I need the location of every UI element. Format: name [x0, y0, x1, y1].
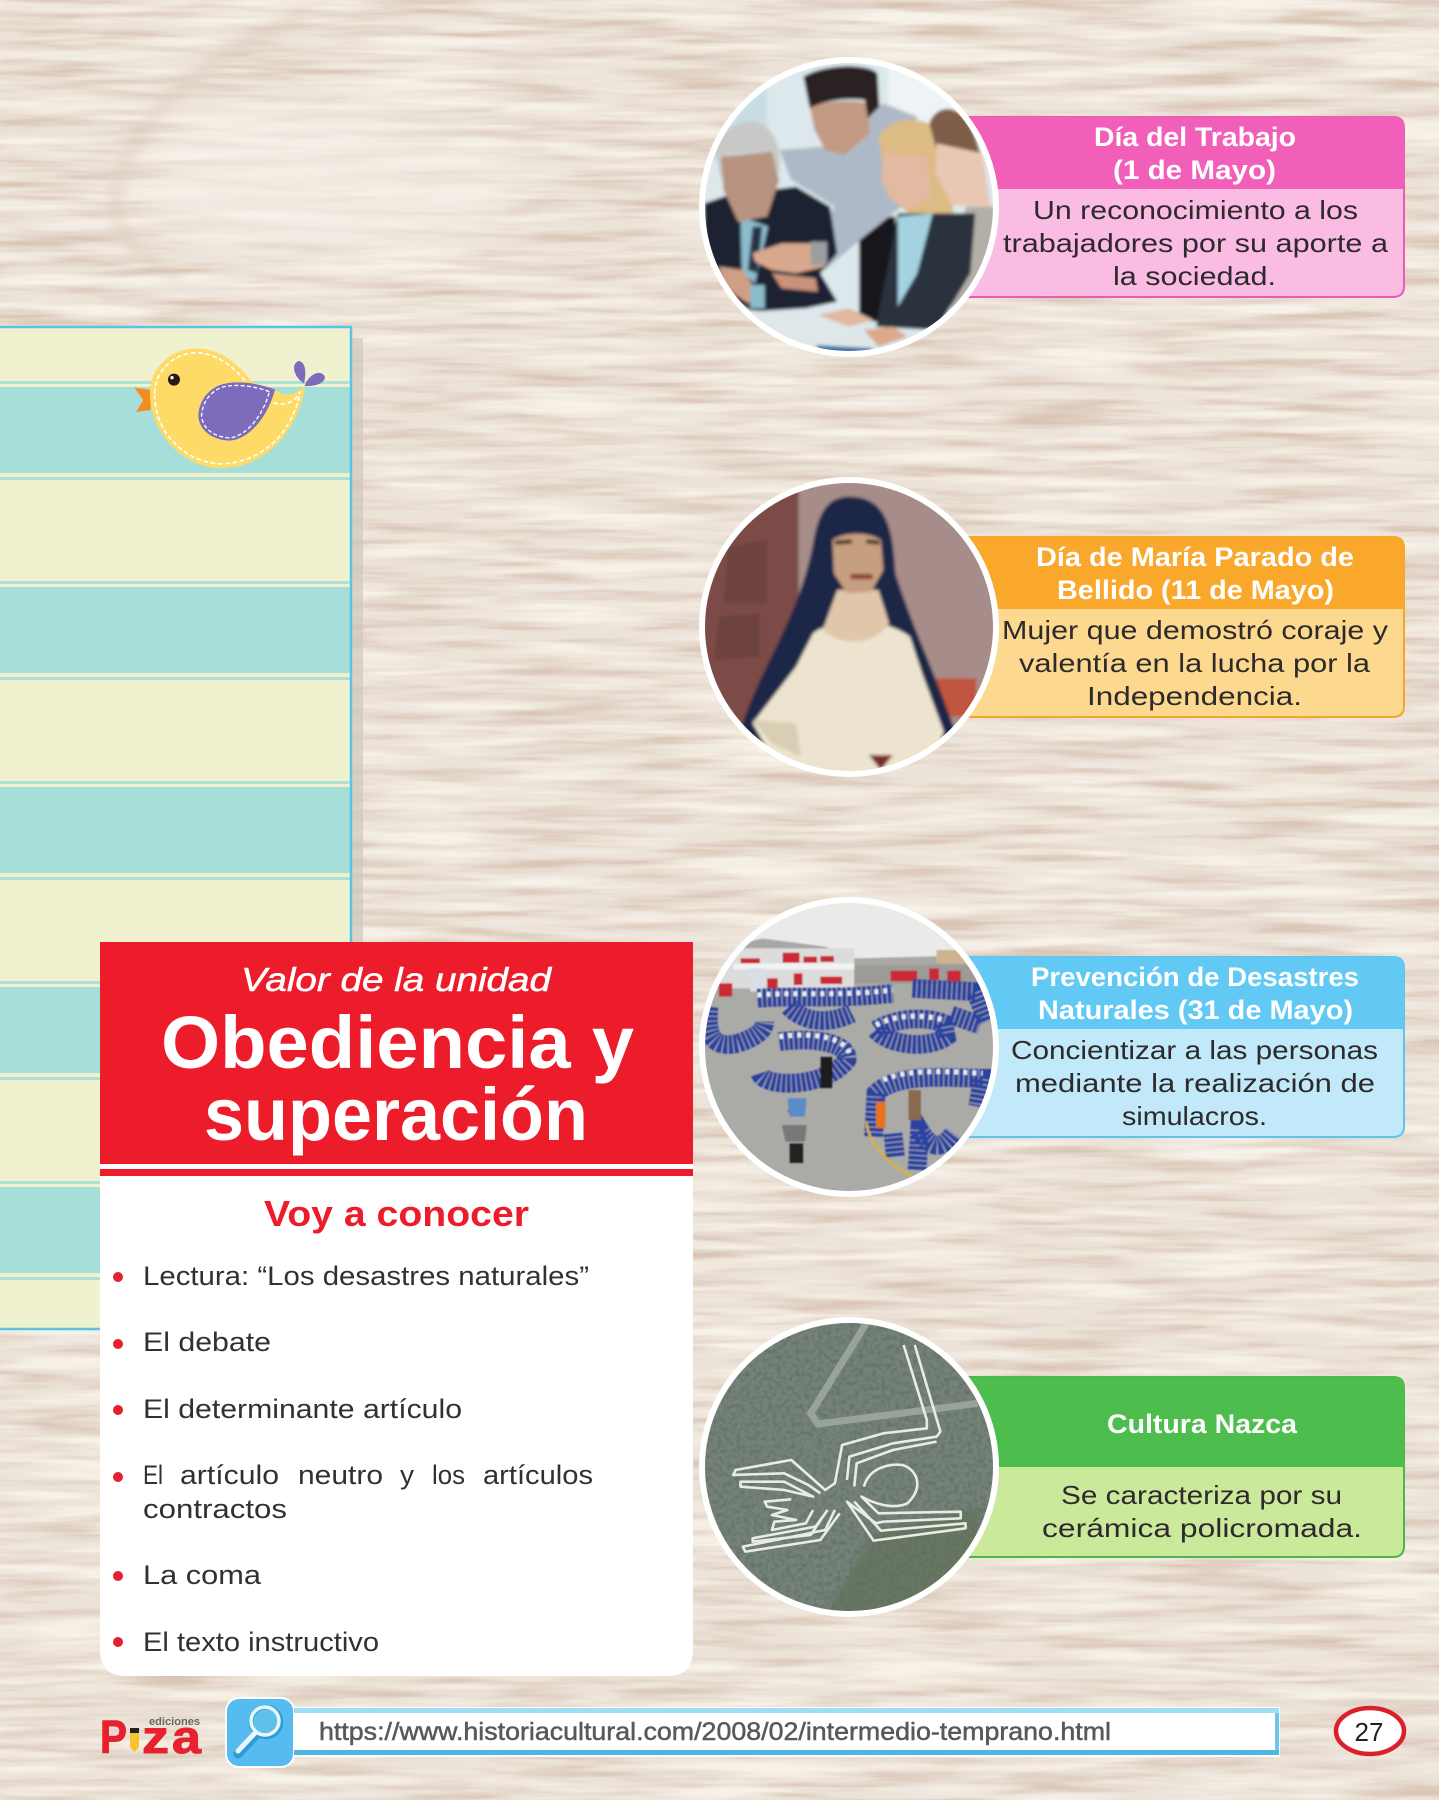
red title block: superación: [204, 1073, 588, 1156]
text: description: cerámica policromada.: [1042, 1513, 1362, 1543]
text: description: valentía en la lucha por la: [1019, 648, 1371, 678]
panel: Valor de la unidad: [100, 942, 693, 1676]
text: description: simulacros.: [1122, 1101, 1267, 1131]
photo: portrait: [699, 477, 999, 777]
panel: Prevención de Desastres Naturales: [699, 897, 1405, 1197]
text: description: [1003, 195, 1389, 291]
heading: Día del Trabajo: Día del Trabajo: [1094, 122, 1296, 152]
logo: Piza ediciones: P: [100, 1711, 127, 1763]
heading: María Parado de Bellido: Bellido (11 de Mayo): [1057, 575, 1334, 605]
heading: Voy a conocer: Voy a conocer: [264, 1193, 529, 1234]
text: description: Se caracteriza por su: [1061, 1480, 1342, 1510]
list: topics: y: [400, 1460, 415, 1490]
text: description: Concientizar a las personas: [1011, 1035, 1378, 1065]
panel: María Parado de Bellido: [699, 477, 1405, 777]
page number: 27: [1355, 1717, 1383, 1747]
text: description: Independencia.: [1087, 681, 1302, 711]
heading: Día del Trabajo: [1094, 122, 1296, 185]
text: description: [1002, 615, 1388, 711]
list: topics: neutro: [298, 1460, 383, 1490]
logo: Piza ediciones: [100, 1711, 201, 1763]
panel: striped paper: [0, 326, 363, 1330]
card background: [940, 117, 1404, 297]
logo: Piza ediciones: z: [142, 1711, 169, 1763]
list: topics: El debate: [143, 1327, 271, 1357]
red title block: [100, 942, 693, 1176]
text: description: [1011, 1035, 1378, 1131]
photo: Nazca spider geoglyph: [699, 1317, 1000, 1620]
card background: [940, 537, 1404, 717]
text: description: Un reconocimiento a los: [1033, 195, 1358, 225]
icon: yellow bird: [134, 348, 325, 468]
text: description: [1042, 1480, 1362, 1543]
heading: Prevención de Desastres Naturales: Prevención de Desastres: [1031, 962, 1359, 992]
card background: [940, 957, 1404, 1137]
heading: Prevención de Desastres Naturales: Naturales (31 de Mayo): [1038, 995, 1353, 1025]
list: topics: Lectura: “Los desastres naturales”: [143, 1261, 589, 1291]
list: topics: artículos: [483, 1460, 593, 1490]
heading: Cultura Nazca: Cultura Nazca: [1107, 1409, 1298, 1439]
list: topics: artículo: [180, 1460, 279, 1490]
link bar: https://www.historiacultural.com/2008/02/intermedio-temprano.html: [319, 1718, 1111, 1746]
heading: Día del Trabajo: (1 de Mayo): [1113, 155, 1276, 185]
list: topics: [113, 1261, 593, 1657]
heading: María Parado de Bellido: [1036, 542, 1354, 605]
heading: Prevención de Desastres Naturales: [1031, 962, 1359, 1025]
red title block: Obediencia y: [161, 1001, 634, 1084]
page number: [1336, 1708, 1404, 1754]
text: description: Mujer que demostró coraje y: [1002, 615, 1388, 645]
list: topics: La coma: [143, 1560, 262, 1590]
list: topics: El determinante artículo: [143, 1394, 462, 1424]
photo: office workers: [699, 57, 999, 357]
text: description: la sociedad.: [1113, 261, 1276, 291]
text: description: mediante la realización de: [1015, 1068, 1375, 1098]
logo: Piza ediciones: ediciones: [149, 1716, 200, 1728]
link bar: [294, 1707, 1280, 1757]
list: topics: El: [143, 1460, 163, 1490]
list: topics: El texto instructivo: [143, 1627, 379, 1657]
card background: [940, 1377, 1404, 1557]
red title block: Valor de la unidad: [241, 961, 553, 998]
white list card: [100, 1160, 693, 1676]
icon: magnifying glass: [226, 1698, 294, 1767]
list: topics: contractos: [143, 1494, 287, 1524]
panel: Día del Trabajo: [699, 57, 1405, 357]
list: topics: los: [432, 1460, 465, 1490]
text: description: trabajadores por su aporte a: [1003, 228, 1389, 258]
logo: Piza ediciones: a: [172, 1711, 201, 1763]
heading: María Parado de Bellido: Día de María Parado de: [1036, 542, 1354, 572]
panel: Cultura Nazca: [699, 1317, 1404, 1620]
photo: school drill: [699, 897, 999, 1197]
